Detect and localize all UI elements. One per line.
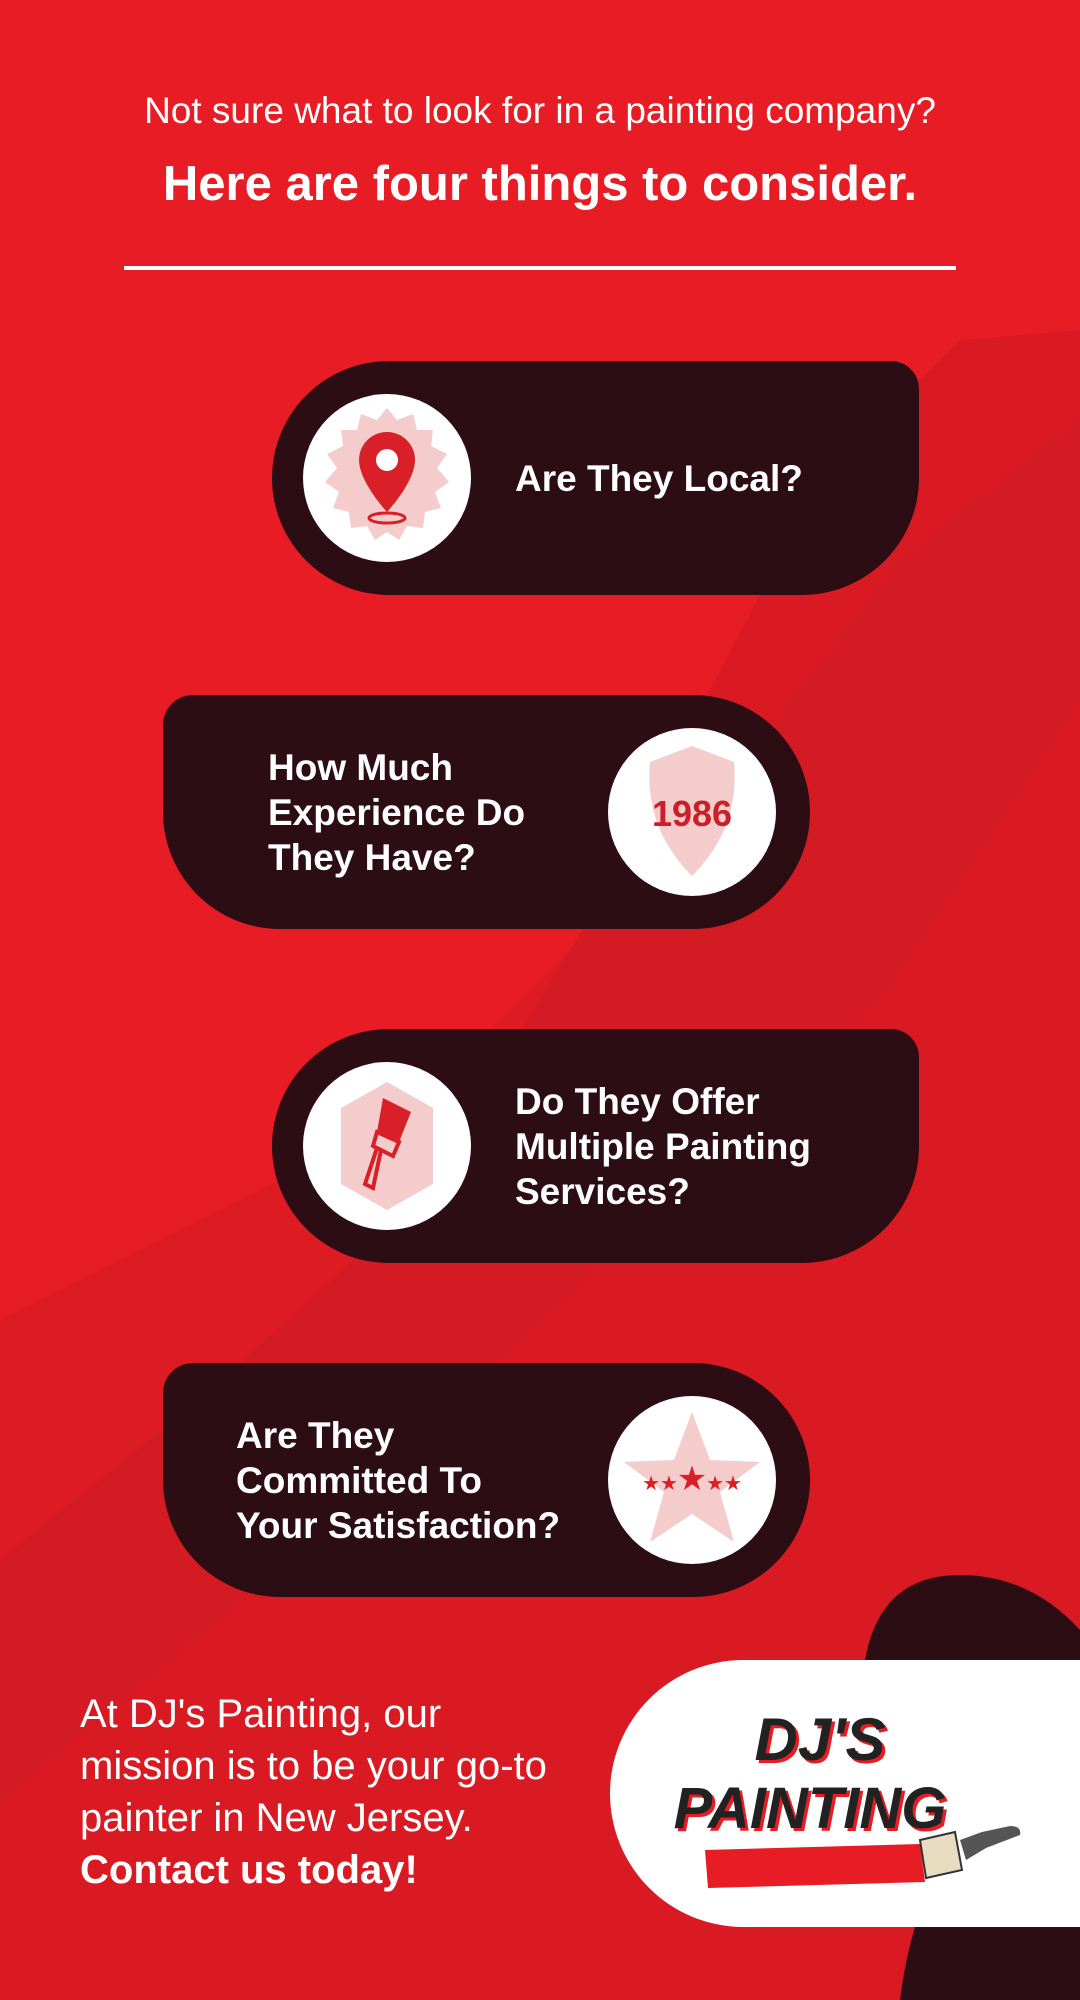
bottom text: Contact us today!	[80, 1848, 418, 1892]
heading	[144, 90, 936, 211]
logo	[610, 1660, 1080, 1927]
icon: stars: ★★	[642, 1473, 678, 1495]
logo: PAINTING	[674, 1776, 946, 1841]
text: Are They	[236, 1415, 394, 1456]
panel: services	[272, 1029, 919, 1263]
icon: stars: ★	[677, 1460, 707, 1498]
bottom text: painter in New Jersey.	[80, 1796, 473, 1840]
text: Services?	[515, 1171, 690, 1212]
icon: stars: ★★	[706, 1473, 742, 1495]
bottom text: mission is to be your go-to	[80, 1744, 547, 1788]
icon: shield 1986: 1986	[652, 793, 732, 834]
text: Do They Offer	[515, 1081, 760, 1122]
logo: DJ'S	[758, 1709, 888, 1776]
heading: Here are four things to consider.	[163, 157, 917, 211]
panel: are they local	[272, 361, 919, 595]
text: Multiple Painting	[515, 1126, 811, 1167]
icon: stars	[608, 1396, 776, 1564]
text	[236, 1415, 560, 1546]
bottom text	[80, 1692, 547, 1892]
logo: DJ'S	[754, 1706, 886, 1773]
text: Are They Local?	[515, 458, 803, 499]
panel: experience	[163, 695, 810, 929]
text: Committed To	[236, 1460, 482, 1501]
text: Experience Do	[268, 792, 525, 833]
text: Your Satisfaction?	[236, 1505, 560, 1546]
icon: location pin	[303, 394, 471, 562]
logo: PAINTING	[677, 1779, 949, 1844]
heading: Not sure what to look for in a painting company?	[144, 90, 936, 131]
text	[515, 1081, 811, 1212]
panel: satisfaction	[163, 1363, 810, 1597]
text: They Have?	[268, 837, 476, 878]
bottom text: At DJ's Painting, our	[80, 1692, 441, 1736]
text: How Much	[268, 747, 453, 788]
icon: paint brush	[303, 1062, 471, 1230]
icon: shield 1986	[608, 728, 776, 896]
text	[268, 747, 525, 878]
